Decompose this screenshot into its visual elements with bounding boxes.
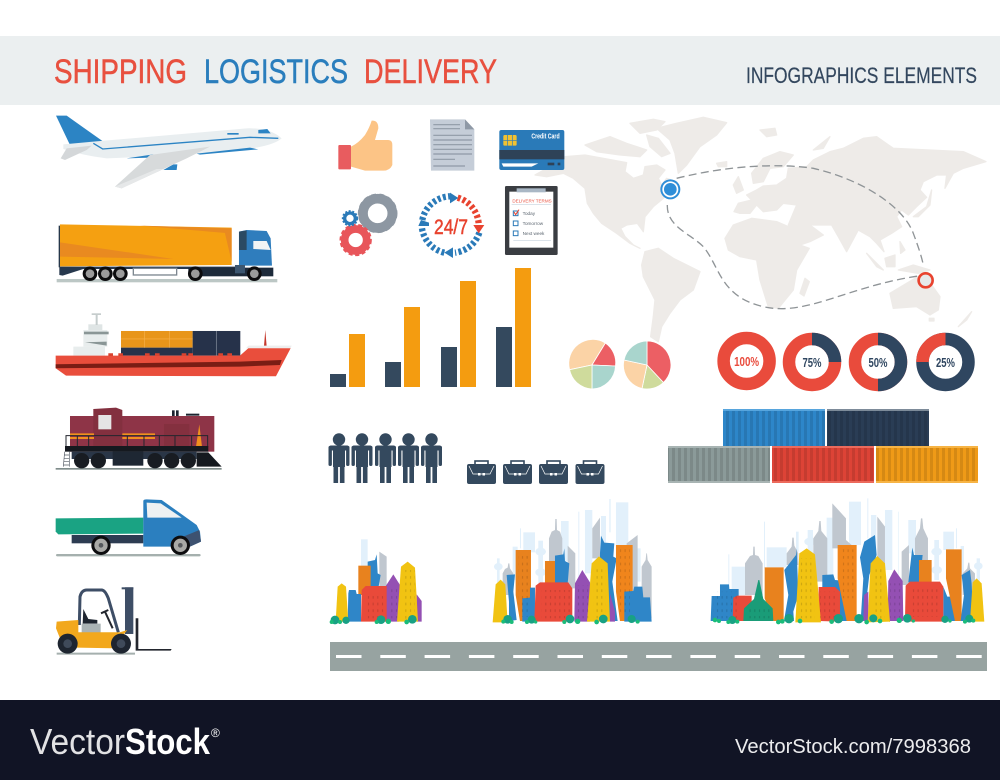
icon: credit card [499, 130, 564, 170]
route dashed lines [667, 166, 923, 309]
marker: origin [660, 179, 680, 199]
icon: pickup truck [56, 499, 201, 556]
icon: semi truck [57, 224, 277, 282]
donut 75%: 75% [802, 355, 822, 370]
donut 75% [789, 339, 835, 385]
icon: document [430, 119, 474, 171]
pie chart left [569, 339, 616, 389]
briefcase icons [467, 461, 604, 484]
footer logo: Stock [125, 721, 211, 762]
footer logo: Vector [30, 721, 125, 762]
map landmasses [535, 117, 986, 342]
footer logo: ® [211, 726, 220, 740]
icon: container ship [56, 313, 292, 376]
shipping containers stack [668, 409, 978, 483]
pie chart right [623, 341, 671, 389]
title: shipping logistics delivery: SHIPPING [54, 53, 187, 91]
marker: destination [919, 273, 933, 287]
icon: delivery terms clipboard: DELIVERY TERMS [512, 198, 552, 203]
title: shipping logistics delivery [54, 53, 497, 91]
world map with routes [535, 117, 986, 342]
icon: forklift [56, 587, 172, 655]
large city [711, 498, 984, 624]
icon: gears [341, 195, 396, 255]
footer url: VectorStock.com/7998368 [735, 736, 971, 758]
donut 50% [855, 339, 901, 385]
donut 100% [724, 338, 770, 384]
icon: credit card: Credit Card [531, 133, 560, 140]
title: shipping logistics delivery: DELIVERY [364, 53, 497, 91]
footer band [0, 700, 1000, 780]
donut 50%: 50% [868, 355, 888, 370]
icon: delivery terms clipboard: Tomorrow [523, 221, 544, 226]
title: shipping logistics delivery: LOGISTICS [204, 53, 348, 91]
donut 100%: 100% [734, 354, 759, 369]
icon: thumbs up [338, 121, 392, 171]
icon: 24/7 cycle [418, 193, 484, 258]
donut 25%: 25% [936, 355, 955, 370]
people icons [328, 433, 442, 483]
icon: 24/7 cycle: 24/7 [434, 214, 468, 239]
icon: locomotive [56, 408, 222, 470]
medium city [493, 499, 652, 624]
bar chart [330, 268, 531, 387]
small city [330, 539, 422, 624]
icon: delivery terms clipboard: Today [523, 211, 536, 216]
icon: delivery terms clipboard: Next week [523, 231, 545, 236]
icon: delivery terms clipboard [505, 186, 558, 255]
road [330, 642, 987, 671]
donut 25% [922, 339, 968, 385]
icon: airplane [56, 116, 282, 188]
footer logo [30, 721, 220, 762]
header band [0, 36, 1000, 105]
